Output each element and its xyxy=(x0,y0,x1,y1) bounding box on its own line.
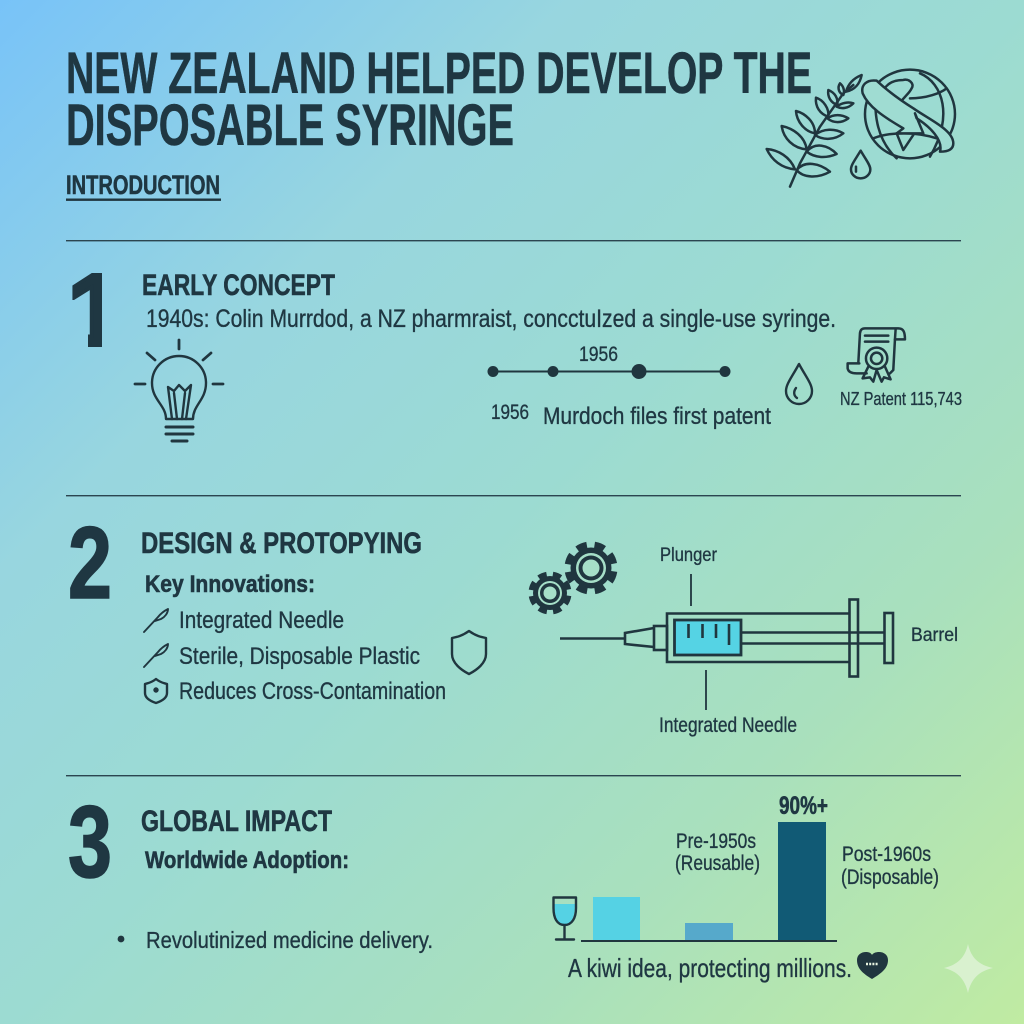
section 1 xyxy=(72,273,962,442)
heading: global impact: GLOBAL IMPACT xyxy=(141,805,332,838)
timeline: 1956 xyxy=(491,401,529,424)
bar chart: 90%+ xyxy=(779,792,828,820)
icon: small shield xyxy=(145,679,167,703)
bar chart: (Disposable) xyxy=(841,866,939,889)
title xyxy=(66,41,812,158)
title: DISPOSABLE SYRINGE xyxy=(66,93,514,158)
list: innovations: Integrated Needle xyxy=(179,607,344,634)
icon: patent certificate xyxy=(848,328,905,382)
icon: heart xyxy=(857,952,888,979)
section 3 xyxy=(68,785,939,983)
section 2 xyxy=(68,506,958,737)
list: innovations: Reduces Cross-Contamination xyxy=(179,678,446,705)
syringe diagram xyxy=(560,544,958,737)
icon: light bulb xyxy=(135,340,223,441)
icon: large shield xyxy=(452,631,486,674)
icon: droplet xyxy=(786,364,812,404)
icon: fern leaf xyxy=(767,75,862,187)
heading: early concept: EARLY CONCEPT xyxy=(142,269,335,302)
bar chart: (Reusable) xyxy=(675,852,760,875)
bar chart xyxy=(581,792,939,942)
icon: water drop xyxy=(851,151,870,178)
introduction heading: INTRODUCTION xyxy=(66,170,220,200)
icon: globe with arrow xyxy=(862,70,955,158)
section number 1: 1 xyxy=(67,253,125,370)
icon: gears xyxy=(529,541,618,614)
list: innovations: Sterile, Disposable Plastic xyxy=(179,643,420,670)
syringe diagram: Integrated Needle xyxy=(659,714,797,737)
closing line: A kiwi idea, protecting millions. xyxy=(568,953,852,983)
list: innovations xyxy=(179,607,446,705)
subheading: worldwide adoption: Worldwide Adoption: xyxy=(145,847,349,874)
syringe barrel fill xyxy=(674,620,741,655)
body text: early concept: 1940s: Colin Murrdod, a NZ pharmraist, concctuIzed a single-use syringe. xyxy=(146,305,836,333)
section number 2: 2 xyxy=(68,506,112,620)
dividers xyxy=(66,240,961,776)
decorative sparkle xyxy=(944,944,993,993)
icon: glass xyxy=(554,898,576,940)
icon: needle 2 xyxy=(144,644,168,667)
label: patent number: NZ Patent 115,743 xyxy=(840,388,962,409)
syringe diagram: Plunger xyxy=(660,544,717,566)
timeline: 1956 xyxy=(579,343,618,366)
bar chart: Post-1960s xyxy=(842,843,931,866)
timeline: Murdoch files first patent xyxy=(543,403,771,430)
bar chart: Pre-1950s xyxy=(676,830,756,853)
heading: design and prototyping: DESIGN & PROTOPYING xyxy=(141,527,422,560)
section number 3: 3 xyxy=(68,785,112,899)
subheading: key innovations: Key Innovations: xyxy=(145,571,315,598)
icon: needle 1 xyxy=(144,609,168,632)
timeline xyxy=(488,343,771,430)
bullet text: Revolutinized medicine delivery. xyxy=(146,927,433,953)
syringe diagram: Barrel xyxy=(911,624,958,646)
